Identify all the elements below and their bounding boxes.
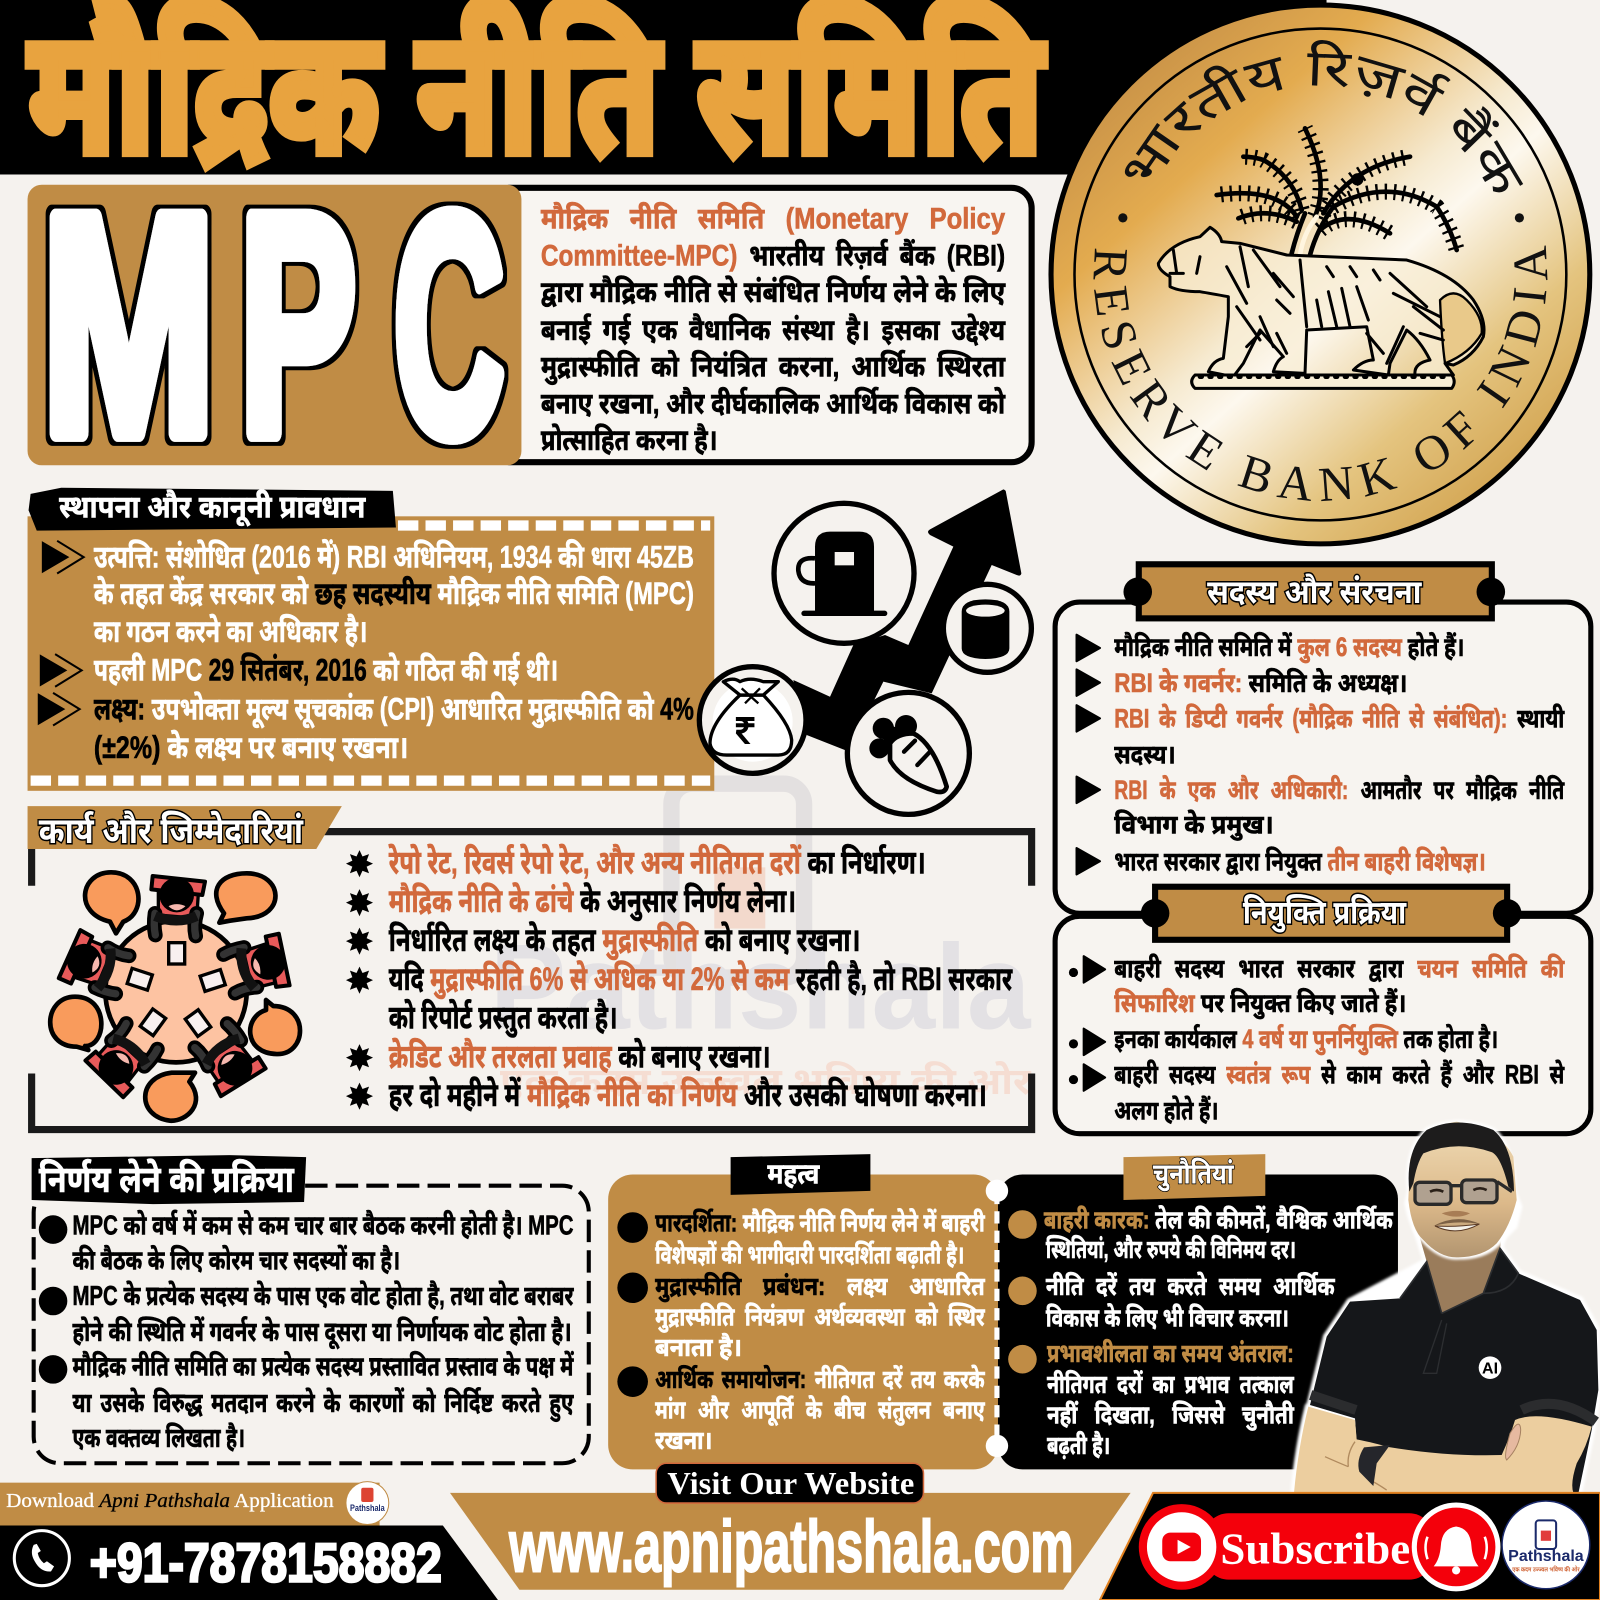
decision list: MPC के प्रत्येक सदस्य के पास एक वोट होता है, तथा वोट बराबर xyxy=(72,1280,574,1311)
importance list: मुद्रास्फीति प्रबंधन: लक्ष्य आधारित xyxy=(655,1272,986,1302)
decision list xyxy=(72,1210,574,1453)
tiger base xyxy=(1192,375,1454,388)
functions list: निर्धारित लक्ष्य के तहत मुद्रास्फीति को बनाए रखना। xyxy=(389,921,860,960)
decision list: मौद्रिक नीति समिति का प्रत्येक सदस्य प्रस्तावित प्रस्ताव के पक्ष में xyxy=(72,1351,574,1382)
panel: decision-making process xyxy=(32,1155,589,1463)
title: मौद्रिक नीति समिति xyxy=(29,0,1046,189)
Pathshala logo badge: Pathshala xyxy=(1508,1548,1584,1565)
establishment text: उत्पत्ति: संशोधित (2016 में) RBI अधिनियम, 1934 की धारा 45ZB xyxy=(94,538,694,574)
decision list: या उसके विरुद्ध मतदान करने के कारणों को निर्दिष्ट करते हुए xyxy=(72,1387,574,1422)
heading: importance: महत्व xyxy=(767,1159,820,1191)
coin English text: RESERVE BANK OF INDIA xyxy=(1093,246,1548,502)
challenges list: बढ़ती है। xyxy=(1047,1431,1110,1460)
crossed arms xyxy=(1294,1407,1592,1493)
definition text: द्वारा मौद्रिक नीति से संबंधित निर्णय लेने के लिए xyxy=(541,274,1006,309)
functions list: को रिपोर्ट प्रस्तुत करता है। xyxy=(389,999,617,1038)
watermark: Pathshala xyxy=(490,784,1032,1102)
panel: challenges xyxy=(986,1154,1398,1469)
bullets xyxy=(39,541,84,726)
phone number: +91-7878158882 xyxy=(90,1532,442,1594)
youtube button xyxy=(1139,1504,1224,1590)
panel: importance xyxy=(608,1154,998,1469)
watermark: Pathshala: एक कदम उज्ज्वल भविष्य की ओर xyxy=(500,1061,1031,1102)
heading: members: सदस्य और संरचना xyxy=(1207,573,1423,610)
establishment text: लक्ष्य: उपभोक्ता मूल्य सूचकांक (CPI) आधारित मुद्रास्फीति को 4% xyxy=(94,690,694,728)
Pathshala logo badge: एक कदम उज्ज्वल भविष्य की ओर xyxy=(1512,1565,1580,1573)
decision list: की बैठक के लिए कोरम चार सदस्यों का है। xyxy=(72,1244,400,1275)
watch xyxy=(1358,1445,1390,1486)
heading: members xyxy=(1123,564,1505,618)
icon: oil drum xyxy=(943,584,1031,672)
functions list: रेपो रेट, रिवर्स रेपो रेट, और अन्य नीतिगत दरों का निर्धारण। xyxy=(388,843,926,880)
definition text: बनाई गई एक वैधानिक संस्था है। इसका उद्देश्य xyxy=(541,312,1006,347)
icon: bell xyxy=(1414,1505,1498,1589)
phone contact bar xyxy=(0,1526,498,1600)
importance list: विशेषज्ञों की भागीदारी पारदर्शिता बढ़ाती है। xyxy=(655,1240,964,1269)
decision list: MPC को वर्ष में कम से कम चार बार बैठक करनी होती है। MPC xyxy=(72,1210,574,1241)
definition text: मौद्रिक नीति समिति (Monetary Policy xyxy=(541,202,1006,236)
definition text: Committee-MPC) भारतीय रिज़र्व बैंक (RBI) xyxy=(541,238,1005,272)
heading: appointment: नियुक्ति प्रक्रिया xyxy=(1243,893,1407,932)
establishment text: का गठन करने का अधिकार है। xyxy=(94,613,367,649)
visit our website pill: Visit Our Website xyxy=(667,1466,914,1501)
icon: carrot xyxy=(847,692,969,814)
watermark: Pathshala: Pathshala xyxy=(490,920,1032,1055)
head xyxy=(1407,1122,1520,1257)
panel: members and structure xyxy=(1055,564,1591,913)
website url: www.apnipathshala.com xyxy=(509,1504,1073,1587)
panel: establishment and legal provisions xyxy=(28,488,714,791)
functions list: ✸ xyxy=(346,884,374,921)
appointment list: इनका कार्यकाल 4 वर्ष या पुनर्नियुक्ति तक होता है। xyxy=(1114,1023,1498,1055)
definition text xyxy=(541,202,1006,457)
members list: भारत सरकार द्वारा नियुक्त तीन बाहरी विशेषज्ञ। xyxy=(1114,845,1486,877)
ticket notches xyxy=(986,1180,1008,1457)
heading: functions: कार्य और जिम्मेदारियां xyxy=(39,811,304,851)
panel: MPC definition: C xyxy=(394,151,504,500)
icon: fuel pump xyxy=(774,503,914,643)
appointment list: अलग होते हैं। xyxy=(1114,1094,1218,1125)
glasses xyxy=(1415,1180,1512,1204)
panel: MPC definition xyxy=(28,151,1032,500)
members list: सदस्य। xyxy=(1114,739,1176,769)
circle bullets xyxy=(39,1215,67,1244)
functions list: ✸ xyxy=(346,962,374,999)
heading: importance xyxy=(731,1154,870,1195)
subscribe bar xyxy=(1100,1493,1600,1600)
functions list: क्रेडिट और तरलता प्रवाह को बनाए रखना। xyxy=(389,1037,770,1074)
body xyxy=(1294,1227,1598,1493)
challenges list: प्रभावशीलता का समय अंतराल: xyxy=(1047,1339,1294,1368)
importance list: रखना। xyxy=(655,1427,712,1455)
circle bullets xyxy=(1008,1210,1037,1239)
members list: मौद्रिक नीति समिति में कुल 6 सदस्य होते हैं। xyxy=(1114,631,1464,663)
definition text: मुद्रास्फीति को नियंत्रित करना, आर्थिक स्थिरता xyxy=(541,350,1006,386)
circle bullets xyxy=(617,1212,648,1243)
MPC big letters xyxy=(42,151,504,500)
challenges list xyxy=(1044,1206,1394,1460)
triangle bullets xyxy=(1077,635,1100,874)
icon: rupee money bag xyxy=(699,667,806,773)
functions list: हर दो महीने में मौद्रिक नीति का निर्णय और उसकी घोषणा करना। xyxy=(389,1076,987,1113)
appointment list: बाहरी सदस्य भारत सरकार द्वारा चयन समिति की xyxy=(1114,954,1565,984)
coin Hindi text: भारतीय रिज़र्व बैंक xyxy=(1124,40,1524,192)
illustration: round table meeting xyxy=(50,872,300,1121)
appointment list xyxy=(1114,954,1565,1125)
MPC big letters: M xyxy=(42,151,215,500)
challenges list: नहीं दिखता, जिससे चुनौती xyxy=(1047,1400,1294,1430)
functions list xyxy=(346,843,1013,1115)
members list: विभाग के प्रमुख। xyxy=(1114,809,1273,841)
challenges list: बाहरी कारक: तेल की कीमतें, वैश्विक आर्थिक xyxy=(1044,1206,1394,1235)
challenges list: विकास के लिए भी विचार करना। xyxy=(1046,1304,1289,1333)
website banner xyxy=(450,1463,1131,1590)
establishment text: के तहत केंद्र सरकार को छह सदस्यीय मौद्रिक नीति समिति (MPC) xyxy=(94,575,694,611)
functions list: यदि मुद्रास्फीति 6% से अधिक या 2% से कम रहती है, तो RBI सरकार xyxy=(389,960,1013,999)
functions list: मौद्रिक नीति के ढांचे के अनुसार निर्णय लेना। xyxy=(389,882,796,921)
importance list: बनाता है। xyxy=(655,1333,742,1362)
app logo xyxy=(346,1482,389,1524)
functions list: ✸ xyxy=(346,1039,374,1076)
shirt logo badge: AI xyxy=(1482,1360,1498,1377)
dotted triangle bullets xyxy=(1084,956,1105,1091)
decision list: एक वक्तव्य लिखता है। xyxy=(72,1422,245,1453)
app logo: Pathshala xyxy=(350,1503,385,1513)
challenges list: नीति दरें तय करते समय आर्थिक xyxy=(1046,1272,1335,1301)
heading: appointment xyxy=(1141,887,1521,940)
inflation icons with rising arrow xyxy=(699,489,1031,814)
establishment text: पहली MPC 29 सितंबर, 2016 को गठित की गई थी। xyxy=(94,652,558,688)
download strip xyxy=(0,1482,389,1526)
importance list: मुद्रास्फीति नियंत्रण अर्थव्यवस्था को स्थिर xyxy=(655,1303,985,1333)
heading: establishment: स्थापना और कानूनी प्रावधान xyxy=(59,488,366,526)
subscribe text: Subscribe xyxy=(1220,1523,1410,1573)
importance list: आर्थिक समायोजन: नीतिगत दरें तय करके xyxy=(655,1365,985,1394)
RBI coin seal xyxy=(1048,2,1592,546)
tiger body xyxy=(1158,227,1484,377)
members list: RBI के गवर्नर: समिति के अध्यक्ष। xyxy=(1114,667,1407,698)
decision list: होने की स्थिति में गवर्नर के पास दूसरा या निर्णायक वोट होता है। xyxy=(72,1316,571,1350)
challenges list: स्थितियां, और रुपये की विनिमय दर। xyxy=(1046,1235,1296,1264)
MPC big letters: P xyxy=(240,151,356,500)
icon: phone xyxy=(14,1531,69,1586)
establishment text: (±2%) के लक्ष्य पर बनाए रखना। xyxy=(94,729,408,765)
functions list: ✸ xyxy=(346,1078,374,1115)
download strip: Download Apni Pathshala Application xyxy=(6,1490,334,1512)
definition text: प्रोत्साहित करना है। xyxy=(541,422,717,457)
title bar xyxy=(0,0,1327,189)
establishment text xyxy=(94,538,694,765)
functions list: ✸ xyxy=(346,846,374,883)
palm tree xyxy=(1217,128,1457,255)
importance list xyxy=(655,1209,986,1455)
members list xyxy=(1114,631,1565,877)
arrow xyxy=(793,489,1021,751)
importance list: मांग और आपूर्ति के बीच संतुलन बनाए xyxy=(655,1395,985,1426)
heading: decision: निर्णय लेने की प्रक्रिया xyxy=(39,1158,295,1200)
heading: challenges: चुनौतियां xyxy=(1153,1158,1234,1192)
tiger and palm emblem xyxy=(1158,128,1484,388)
icon: rupee money bag: ₹ xyxy=(733,705,756,752)
heading: challenges xyxy=(1123,1154,1265,1200)
Pathshala logo badge xyxy=(1502,1501,1590,1589)
presenter portrait xyxy=(1294,1122,1598,1493)
shirt logo badge xyxy=(1479,1356,1501,1379)
panel: appointment process xyxy=(1055,887,1591,1134)
panel: functions and responsibilities xyxy=(28,806,1032,1130)
functions list: ✸ xyxy=(346,923,374,960)
appointment list: सिफारिश पर नियुक्त किए जाते हैं। xyxy=(1114,987,1406,1019)
challenges list: नीतिगत दरों का प्रभाव तत्काल xyxy=(1047,1370,1295,1399)
definition text: बनाए रखना, और दीर्घकालिक आर्थिक विकास को xyxy=(541,386,1006,420)
importance list: पारदर्शिता: मौद्रिक नीति निर्णय लेने में बाहरी xyxy=(655,1209,985,1238)
